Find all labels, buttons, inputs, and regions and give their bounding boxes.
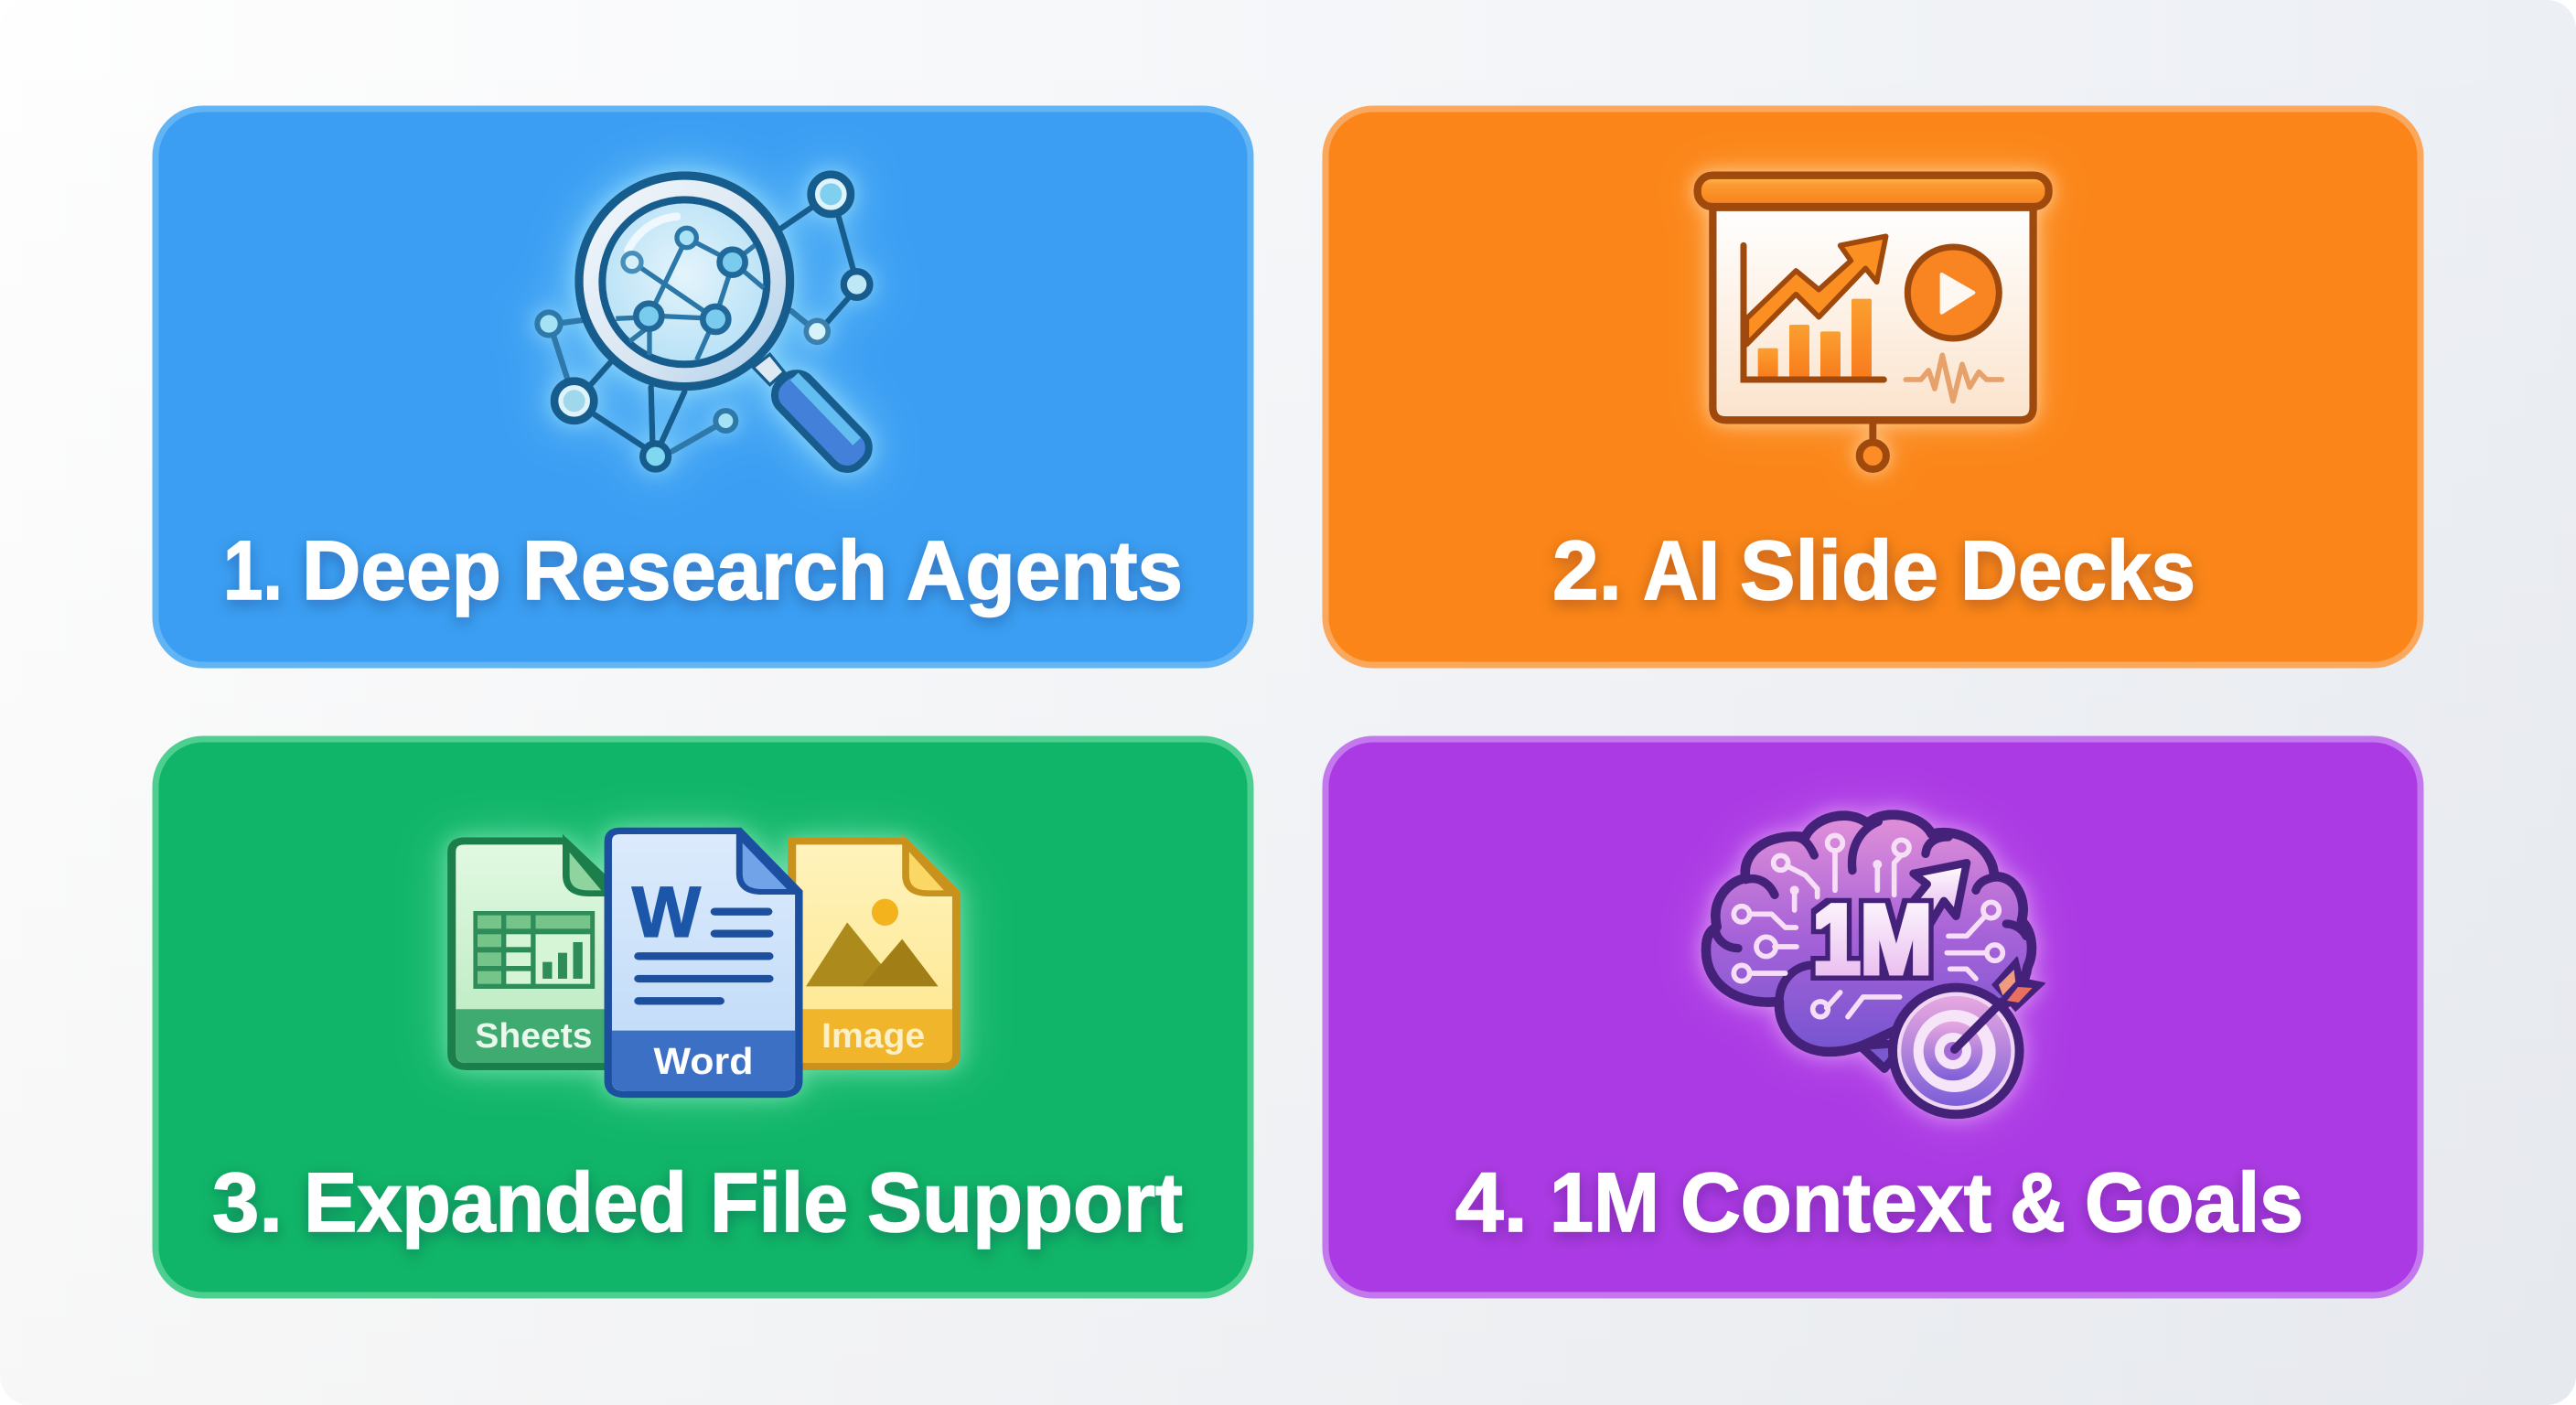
heading: 1m context and goals: Context — [1680, 1156, 1991, 1249]
file: word: W — [632, 872, 702, 953]
icon: brain with 1M and target — [1706, 815, 2045, 1114]
heading: ai slide decks: Slide — [1740, 524, 1938, 617]
heading: deep research agents: Research — [522, 524, 887, 617]
file: sheets — [452, 841, 610, 1067]
heading: deep research agents: Agents — [907, 524, 1183, 617]
heading: ai slide decks: Decks — [1960, 524, 2195, 617]
file: sheets: Sheets — [475, 1016, 593, 1055]
file: word — [608, 831, 799, 1095]
heading: deep research agents: 1. — [223, 524, 283, 617]
icon: file types — [452, 831, 957, 1095]
file: image: Image — [821, 1016, 925, 1055]
panel: ai slide decks — [1326, 109, 2420, 665]
heading: deep research agents: Deep — [302, 524, 501, 617]
heading: 1m context and goals: 1M — [1550, 1156, 1659, 1249]
panel: expanded file support — [156, 739, 1250, 1295]
heading: ai slide decks: 2. — [1552, 524, 1622, 617]
icon: brain with 1M and target: 1M — [1812, 885, 1932, 994]
panel: deep research agents — [156, 109, 1250, 665]
card background purple — [1326, 739, 2420, 1295]
card background green — [156, 739, 1250, 1295]
card background blue — [156, 109, 1250, 665]
heading: 1m context and goals: Goals — [2085, 1156, 2303, 1249]
heading: expanded file support: Support — [867, 1156, 1183, 1249]
panel: 1m context and goals — [1326, 739, 2420, 1295]
heading: 1m context and goals: & — [2010, 1156, 2066, 1249]
heading: expanded file support: Expanded — [304, 1156, 687, 1249]
icon: magnifying glass over network — [537, 175, 876, 477]
icon: presentation screen — [1698, 176, 2049, 469]
heading: ai slide decks: AI — [1643, 524, 1720, 617]
heading: expanded file support: 3. — [212, 1156, 283, 1249]
heading: 1m context and goals: 4. — [1455, 1156, 1528, 1249]
file: image — [792, 841, 957, 1067]
card background orange — [1326, 109, 2420, 665]
heading: expanded file support: File — [710, 1156, 848, 1249]
file: word: Word — [653, 1041, 754, 1082]
